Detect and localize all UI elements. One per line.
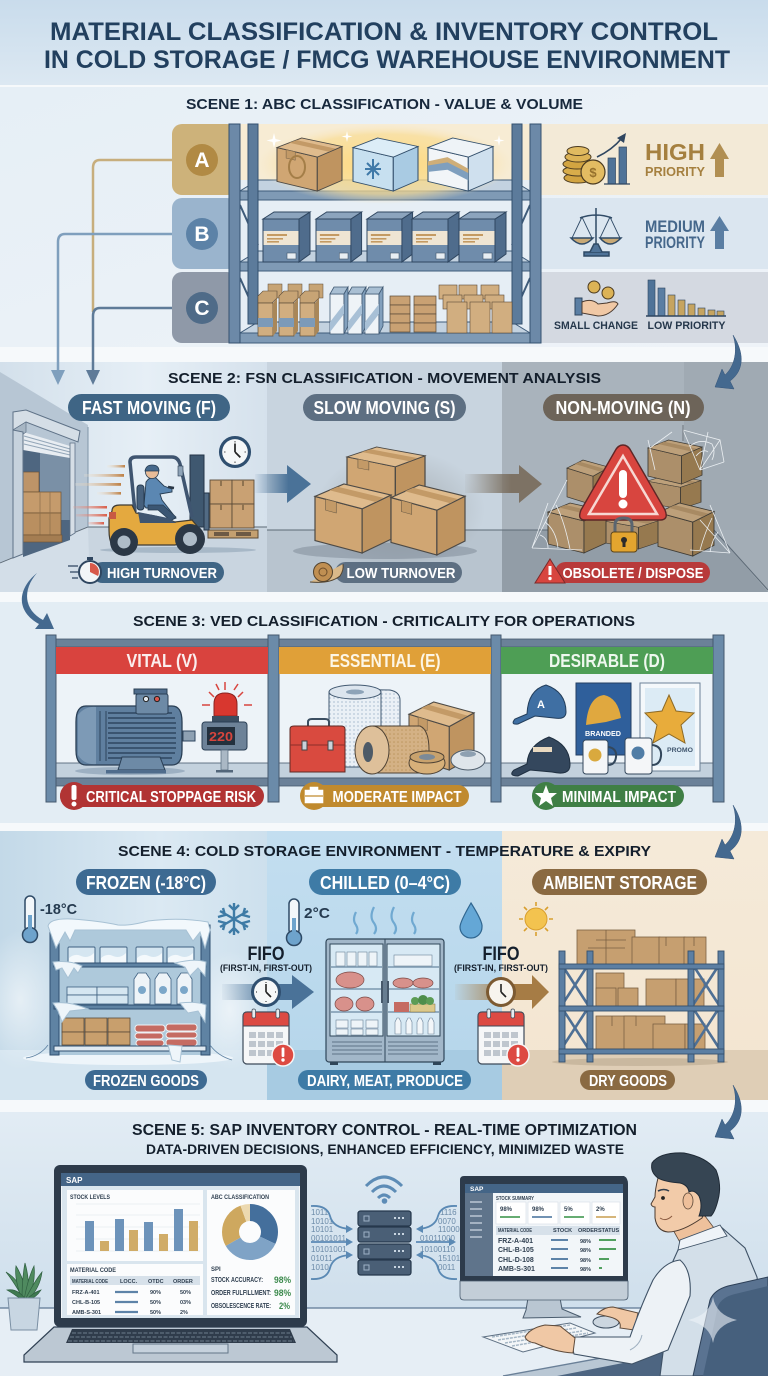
desktop monitor with dashboard: STATUS (598, 1228, 620, 1234)
badge: dairy, meat, produce: DAIRY, MEAT, PRODUCE (307, 1073, 463, 1090)
arrow: scene 2 to scene 3 (22, 573, 54, 629)
header: vital (56, 647, 268, 674)
icon: alarm beacon and display: 220 (209, 729, 233, 744)
FIFO arrow and clock 1 (222, 975, 314, 1009)
icon: water drop (460, 903, 482, 938)
row B band (172, 198, 768, 269)
badge: low turnover (310, 562, 462, 583)
ABC classification donut and KPI: 98% (274, 1275, 291, 1285)
icon: electric motor (75, 689, 195, 775)
header: essential (279, 647, 491, 674)
header: desirable (501, 647, 713, 674)
badge: dry goods: DRY GOODS (589, 1073, 667, 1090)
office chair (693, 1277, 768, 1376)
icon: thermometer 2C: 2°C (304, 905, 330, 922)
row C band (172, 272, 768, 343)
ABC classification donut and KPI: SPI (211, 1267, 221, 1273)
scene 5 heading: SCENE 5: SAP INVENTORY CONTROL - REAL-TIME OPTIMIZATION (132, 1122, 637, 1139)
desktop monitor with dashboard: FRZ-A-401 (498, 1238, 533, 1245)
ABC classification donut and KPI: 2% (279, 1301, 290, 1311)
abandoned boxes with cobwebs (532, 425, 730, 556)
high priority label: HIGH (645, 139, 705, 165)
material code table: 50% (150, 1300, 161, 1306)
material code table: AMB-S-301 (72, 1310, 101, 1316)
material code table: FRZ-A-401 (72, 1290, 100, 1296)
arrow: slow to non-moving (465, 465, 542, 503)
cold vapor waves (354, 907, 416, 934)
row B band: B (194, 223, 210, 246)
data flow left: 10101001 (311, 1245, 347, 1254)
badge: frozen goods: FROZEN GOODS (93, 1073, 199, 1090)
frozen rack (23, 919, 233, 1065)
arrow: fast to slow (255, 465, 311, 503)
cobwebs (532, 430, 730, 553)
desktop monitor with dashboard: AMB-S-301 (498, 1266, 535, 1273)
material code table: 50% (180, 1290, 191, 1296)
torso (660, 1226, 768, 1376)
data flow left: 00101011 (311, 1234, 347, 1243)
shelf frame (46, 635, 724, 802)
desktop monitor with dashboard: CHL-D-108 (498, 1257, 534, 1264)
potted plant (6, 1263, 42, 1330)
low priority declining bar chart (646, 280, 726, 332)
FIFO label 1: (FIRST-IN, FIRST-OUT) (220, 963, 312, 974)
icon: snowflake (218, 903, 250, 935)
material code table: CHL-B-105 (72, 1300, 100, 1306)
icon: padlock (611, 518, 637, 552)
desktop monitor with dashboard: CHL-B-105 (498, 1247, 534, 1254)
badge: minimal impact (532, 782, 684, 810)
title banner: IN COLD STORAGE / FMCG WAREHOUSE ENVIRONMENT (44, 46, 730, 74)
pill: fast moving (68, 394, 230, 421)
C-class small goods (258, 284, 512, 336)
data flow left: 1011 (311, 1208, 329, 1217)
header: desirable: DESIRABLE (D) (549, 651, 665, 671)
material code table: ORDER (173, 1279, 193, 1285)
data flow right: 11000 (438, 1225, 460, 1234)
stock levels chart (67, 1190, 203, 1261)
medium priority label: PRIORITY (645, 233, 705, 252)
pill: fast moving: FAST MOVING (F) (82, 398, 216, 418)
badge: high turnover (68, 557, 224, 583)
desirable items: caps, posters, mugs: BRANDED (585, 729, 622, 738)
icon: alarm beacon and display (202, 682, 252, 772)
pill: ambient storage (532, 869, 707, 895)
connector line from A (93, 160, 172, 312)
laptop with dashboard: SAP (66, 1176, 83, 1185)
pill: non-moving (543, 394, 704, 421)
header: essential: ESSENTIAL (E) (330, 651, 441, 671)
data flow right: 10100110 (420, 1245, 456, 1254)
pill: slow moving: SLOW MOVING (S) (314, 398, 456, 418)
arrow: scene 3 to scene 4 (715, 805, 741, 859)
ABC classification donut and KPI: OBSOLESCENCE RATE: (211, 1303, 271, 1310)
slow moving zone background (267, 362, 502, 592)
ABC classification donut and KPI: ORDER FULFILLMENT: (211, 1290, 271, 1297)
icon: thermometer -18 (22, 896, 77, 942)
neck (672, 1212, 714, 1246)
non moving zone background (502, 362, 768, 592)
arrow: scene 1 to scene 2 (715, 335, 741, 389)
data flow left: 01011 (311, 1254, 333, 1263)
scene 3 heading: SCENE 3: VED CLASSIFICATION - CRITICALITY FOR OPERATIONS (133, 613, 635, 630)
laptop with dashboard (24, 1165, 337, 1362)
scene 5 subheading: DATA-DRIVEN DECISIONS, ENHANCED EFFICIENCY, MINIMIZED WASTE (146, 1141, 624, 1157)
badge: critical stoppage risk (60, 782, 264, 810)
dock door with stacked boxes (13, 410, 80, 558)
data flow right: 01011000 (420, 1234, 456, 1243)
desktop monitor with dashboard (460, 1176, 628, 1318)
collar (678, 1225, 727, 1250)
data flow left: 10101 (311, 1217, 334, 1226)
desk surface (0, 1308, 768, 1376)
desk corner (503, 1345, 665, 1376)
A-class glowing boxes (257, 124, 513, 204)
badge: obsolete / dispose: OBSOLETE / DISPOSE (562, 565, 704, 582)
desktop monitor with dashboard: 5% (564, 1207, 573, 1213)
desktop monitor with dashboard: STOCK (553, 1228, 572, 1234)
pill: non-moving: NON-MOVING (N) (556, 398, 691, 418)
arrow: scene 4 to scene 5 (715, 1085, 741, 1139)
calendar alert 1 (243, 1009, 294, 1066)
person at desk (483, 1153, 768, 1376)
stock levels chart: STOCK LEVELS (70, 1194, 111, 1201)
FIFO label 2: (FIRST-IN, FIRST-OUT) (454, 963, 548, 974)
sparkle watermark (688, 1297, 737, 1343)
medium priority label: MEDIUM (645, 217, 705, 236)
keyboard (483, 1323, 595, 1352)
scene 4 heading: SCENE 4: COLD STORAGE ENVIRONMENT - TEMPERATURE & EXPIRY (118, 843, 651, 860)
material code table: MATERIAL CODE (70, 1267, 117, 1274)
forklift with pallet and clock (73, 436, 258, 556)
data flow right: 0070 (438, 1217, 456, 1226)
badge: moderate impact (300, 782, 469, 810)
row A band: A (194, 149, 210, 172)
icon: warning triangle (580, 445, 666, 520)
FIFO label 2: FIFO (482, 944, 520, 965)
icon: small change hand: SMALL CHANGE (554, 320, 638, 332)
ABC classification donut and KPI: STOCK ACCURACY: (211, 1277, 263, 1284)
calendar alert 2 (478, 1009, 529, 1066)
desktop monitor with dashboard: MATERIAL CODE (498, 1228, 532, 1234)
desktop monitor with dashboard: 2% (596, 1207, 605, 1213)
connector arrow from B (51, 234, 172, 385)
wifi icon (366, 1177, 402, 1204)
shelving rack (229, 124, 541, 343)
desktop monitor with dashboard: 98% (580, 1239, 591, 1245)
medium priority label (645, 216, 729, 252)
data flow right: 1116 (440, 1208, 457, 1217)
badge: obsolete / dispose (535, 559, 710, 583)
B-class boxes (263, 212, 506, 262)
material code table: LOCC. (120, 1279, 138, 1285)
FIFO arrow and clock 2 (455, 975, 549, 1009)
header: vital: VITAL (V) (126, 651, 198, 671)
panel: scene 1 ABC classification (0, 87, 768, 347)
mouse (593, 1316, 619, 1328)
ABC classification donut and KPI (207, 1190, 295, 1315)
pill: chilled: CHILLED (0–4°C) (320, 873, 450, 893)
desktop monitor with dashboard: 98% (500, 1207, 513, 1213)
scene 2 heading: SCENE 2: FSN CLASSIFICATION - MOVEMENT ANALYSIS (168, 370, 601, 387)
badge: low turnover: LOW TURNOVER (346, 565, 456, 582)
material code table: MATERIAL CODE (72, 1279, 108, 1285)
desktop monitor with dashboard: 98% (532, 1207, 545, 1213)
desktop monitor with dashboard: 98% (580, 1258, 591, 1264)
ambient rack with boxes (552, 930, 728, 1066)
badge: critical stoppage risk: CRITICAL STOPPAGE RISK (86, 789, 256, 806)
icon: coins and rising chart: $ (589, 165, 597, 180)
dusty boxes (293, 447, 485, 570)
connector arrow from C (86, 308, 172, 385)
title banner (0, 0, 768, 85)
panel: scene 5 SAP inventory control (0, 1112, 768, 1376)
glass-door fridge (326, 939, 444, 1065)
low priority declining bar chart: LOW PRIORITY (648, 320, 726, 332)
data flow right: 0011 (438, 1263, 456, 1272)
icon: thermometer 2C (286, 899, 330, 946)
scene 1 heading: SCENE 1: ABC CLASSIFICATION - VALUE & VOLUME (186, 96, 583, 113)
material code table: 03% (180, 1300, 191, 1306)
driver (144, 465, 176, 521)
badge: moderate impact: MODERATE IMPACT (332, 789, 462, 806)
ABC classification donut and KPI: 98% (274, 1288, 291, 1298)
row C band: C (194, 297, 210, 320)
pill: slow moving (303, 394, 466, 421)
icon: balance scale (571, 208, 621, 256)
data flow left: 1010 (311, 1263, 329, 1272)
arm and sleeve (572, 1260, 690, 1364)
icon: small change hand (554, 281, 638, 332)
badge: minimal impact: MINIMAL IMPACT (562, 789, 676, 806)
hand on keyboard (525, 1325, 575, 1353)
title banner: MATERIAL CLASSIFICATION & INVENTORY CONTROL (50, 18, 718, 46)
server stack (358, 1211, 411, 1275)
material code table: 50% (150, 1310, 161, 1316)
panel: scene 4 cold storage (0, 831, 768, 1100)
material code table: OTDC (148, 1279, 164, 1285)
pill: frozen: FROZEN (-18°C) (86, 873, 206, 893)
FIFO label 2 (454, 944, 548, 974)
chilled zone background (267, 831, 502, 1100)
desirable items: caps, posters, mugs: PROMO (667, 747, 693, 754)
pill: ambient storage: AMBIENT STORAGE (543, 873, 697, 893)
desirable items: caps, posters, mugs (512, 683, 700, 776)
ABC classification donut and KPI: ABC CLASSIFICATION (211, 1194, 269, 1201)
panel: scene 3 VED classification (0, 602, 768, 823)
pill: frozen (76, 869, 216, 895)
speed lines (73, 465, 125, 524)
fast moving zone background (0, 362, 267, 592)
FIFO label 1: FIFO (248, 944, 284, 965)
material code table: 90% (150, 1290, 161, 1296)
desirable items: caps, posters, mugs: A (537, 699, 545, 711)
data flow right (416, 1206, 461, 1279)
FIFO label 1 (220, 944, 312, 974)
ambient zone background (502, 831, 768, 1100)
hair (652, 1153, 720, 1216)
essential items: rolls, toolbox, box, tape (290, 685, 485, 774)
row A band (172, 124, 768, 195)
desktop monitor with dashboard: 98% (580, 1267, 591, 1273)
icon: thermometer -18: -18°C (40, 901, 77, 918)
pill: chilled (309, 869, 461, 895)
desktop monitor with dashboard: ORDER (578, 1228, 598, 1234)
desktop monitor with dashboard: 98% (580, 1248, 591, 1254)
high priority label (645, 139, 729, 179)
panel: scene 2 FSN classification (0, 362, 768, 592)
data flow right: 15101 (438, 1254, 461, 1263)
desktop monitor with dashboard: SAP (470, 1186, 484, 1193)
icon: coins and rising chart (563, 133, 630, 184)
data flow left: 10101 (311, 1225, 334, 1234)
material code table (67, 1264, 203, 1316)
data flow left (311, 1206, 353, 1279)
badge: high turnover: HIGH TURNOVER (107, 565, 217, 582)
frozen zone background (0, 831, 267, 1100)
face (651, 1175, 712, 1232)
material code table: 2% (180, 1310, 188, 1316)
desktop monitor with dashboard: STOCK SUMMARY (496, 1196, 535, 1202)
icon: sun (519, 902, 553, 936)
high priority label: PRIORITY (645, 164, 705, 179)
